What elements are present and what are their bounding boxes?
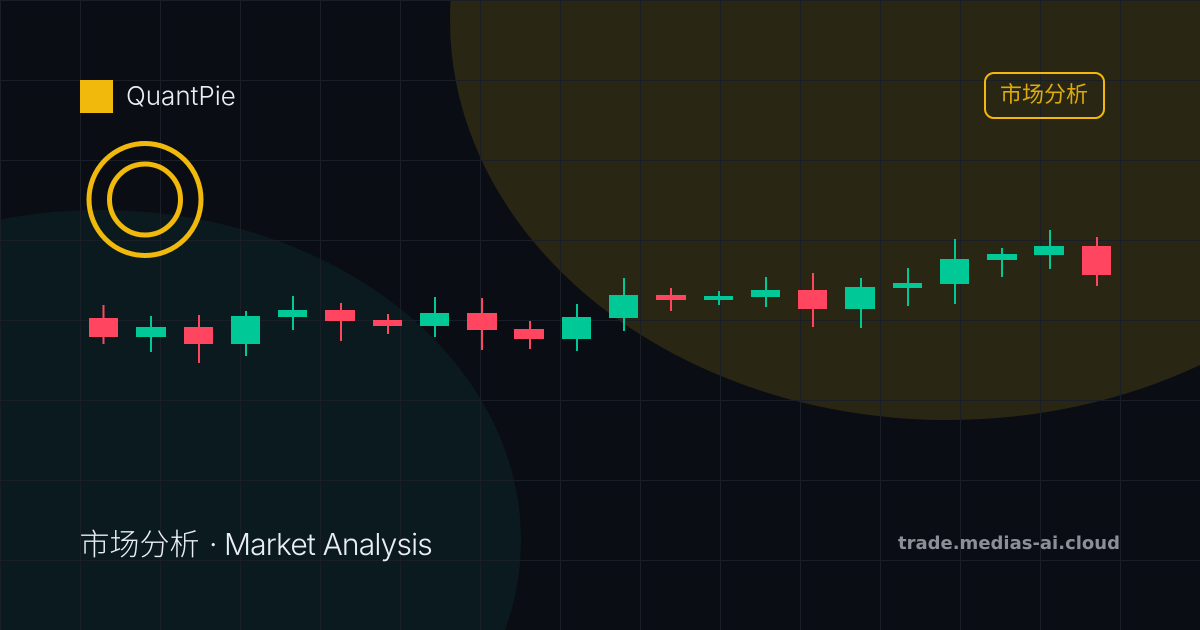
background blob: gold ellipse xyxy=(450,0,1200,420)
candlestick chart xyxy=(89,230,1111,363)
title: 市场分析 xyxy=(80,527,200,563)
title: Market Analysis xyxy=(224,527,432,563)
background blob: teal ellipse xyxy=(0,210,521,630)
logo: QuantPie brand xyxy=(80,80,236,113)
badge: market analysis tag xyxy=(985,73,1104,118)
badge: market analysis tag: 市场分析 xyxy=(1000,82,1088,108)
brand name: QuantPie xyxy=(126,81,236,112)
footer url: trade.medias-ai.cloud xyxy=(898,533,1120,554)
title: · xyxy=(209,527,217,563)
icon: gold square xyxy=(80,80,113,113)
icon: concentric gold rings xyxy=(89,144,201,256)
